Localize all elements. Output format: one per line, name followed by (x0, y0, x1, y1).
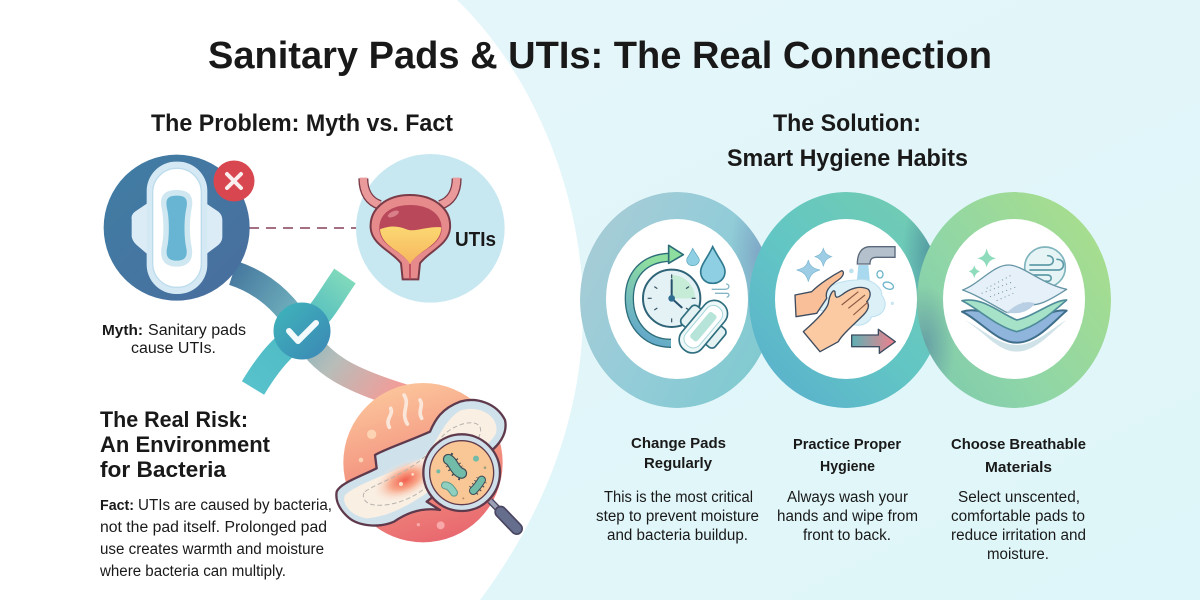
fact text (99, 497, 332, 580)
heading: the solution: The Solution: (773, 110, 921, 137)
background: white left panel (0, 0, 583, 600)
step 3 text: choose breathable materials: Select unscented, (958, 489, 1080, 506)
fact text: not the pad itself. Prolonged pad (100, 519, 327, 536)
heading: the real risk: An Environment (100, 432, 270, 457)
ring 2 (749, 192, 930, 408)
connector: ribbon from myth to real risk (233, 273, 405, 397)
myth text: Sanitary pads (148, 322, 246, 339)
fact text: Fact: (100, 497, 134, 514)
ring 1 (580, 192, 762, 408)
step 1 text: change pads regularly (596, 435, 759, 544)
fact text: use creates warmth and moisture (100, 541, 324, 558)
connector: dashed line from pad to UTIs (249, 227, 357, 229)
heading: the real risk: The Real Risk: (100, 407, 248, 432)
fact text: where bacteria can multiply. (99, 563, 286, 580)
icon: check mark badge (274, 302, 330, 360)
icon: red cross badge (214, 160, 254, 202)
heading: the problem: The Problem: Myth vs. Fact (151, 110, 453, 137)
step 2 text: practice proper hygiene (777, 436, 918, 544)
icon: sanitary pad in blue circle (104, 155, 250, 301)
myth text (102, 322, 246, 357)
label: UTIs: UTIs (455, 229, 496, 251)
teal crossing band (253, 276, 345, 388)
step 3 text: choose breathable materials (951, 436, 1086, 563)
step 2 text: practice proper hygiene: Practice Proper (793, 436, 901, 453)
heading: the solution (727, 110, 968, 172)
step 3 text: choose breathable materials: comfortable pads to (951, 508, 1085, 525)
icon: bladder in light blue circle (356, 154, 505, 303)
icon: washing hands under faucet (795, 247, 895, 353)
white disc 2 (775, 219, 917, 379)
heading: the solution: Smart Hygiene Habits (727, 145, 968, 172)
step 2 text: practice proper hygiene: front to back. (803, 527, 891, 544)
step 3 text: choose breathable materials: reduce irritation and (951, 527, 1086, 544)
step 1 text: change pads regularly: and bacteria buildup. (607, 527, 748, 544)
icon: clock, drops and pad (629, 245, 739, 364)
icon: soiled pad under magnifying glass (336, 383, 517, 542)
step 3 text: choose breathable materials: moisture. (987, 546, 1049, 563)
step 1 text: change pads regularly: step to prevent moisture (596, 508, 759, 525)
step 1 text: change pads regularly: Regularly (644, 455, 713, 472)
heading: the real risk: for Bacteria (100, 457, 226, 482)
fact text: UTIs are caused by bacteria, (138, 497, 332, 514)
white disc 1 (606, 219, 748, 379)
title: Sanitary Pads & UTIs: The Real Connection (208, 35, 992, 77)
white disc 3 (943, 219, 1085, 379)
step 2 text: practice proper hygiene: hands and wipe from (777, 508, 918, 525)
heading: the real risk (100, 407, 270, 482)
step 3 text: choose breathable materials: Materials (985, 459, 1052, 476)
icon: breathable layers (962, 247, 1067, 352)
myth text: Myth: (102, 322, 143, 339)
step 1 text: change pads regularly: This is the most critical (604, 489, 753, 506)
step 2 text: practice proper hygiene: Always wash your (787, 489, 908, 506)
step 1 text: change pads regularly: Change Pads (631, 435, 726, 452)
step 2 text: practice proper hygiene: Hygiene (820, 458, 875, 475)
myth text: cause UTIs. (131, 340, 216, 357)
ring 3 (917, 192, 1111, 408)
step 3 text: choose breathable materials: Choose Breathable (951, 436, 1086, 453)
